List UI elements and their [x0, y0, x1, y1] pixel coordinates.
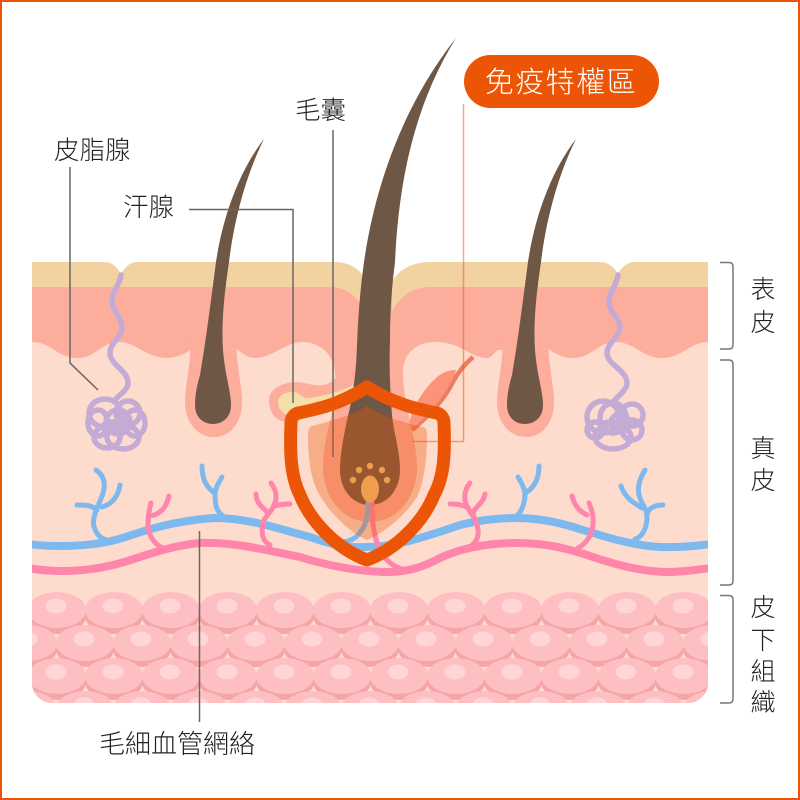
- sweat gland: [269, 378, 356, 422]
- bracket: dermis: [720, 360, 733, 585]
- hair capillary: pink: [372, 502, 402, 569]
- leader line: follicle: [332, 130, 334, 457]
- label: subcutaneous tissue: 下: [750, 627, 776, 655]
- leader line: sebaceous gland: [70, 167, 98, 390]
- leader line: sweat gland: [189, 210, 293, 403]
- label: subcutaneous tissue: 皮: [750, 594, 776, 622]
- leader line: capillary network: [198, 531, 200, 722]
- skin cross-section: [32, 262, 708, 703]
- hair follicle left: [185, 349, 242, 437]
- hair capillary: blue: [338, 503, 368, 542]
- translucent immune zone overlay: [308, 406, 427, 540]
- arrector pili muscle: [409, 357, 473, 430]
- label: dermis: [750, 435, 776, 495]
- leader line: immune privilege zone: [412, 104, 464, 442]
- capillary network: blue vessels: [28, 466, 712, 547]
- label: epidermis: 表: [750, 276, 776, 304]
- label: sebaceous gland: 皮脂腺: [54, 137, 131, 165]
- epidermis layer: [32, 285, 708, 522]
- hair follicle right: [497, 349, 554, 437]
- dermis layer: [32, 342, 708, 703]
- capillary network: pink vessels: [28, 483, 712, 572]
- bracket: epidermis: [720, 262, 733, 349]
- label: dermis: 皮: [750, 467, 776, 495]
- sebaceous gland left: [88, 275, 145, 449]
- stratum corneum: [32, 262, 708, 312]
- shield outline: [291, 387, 444, 560]
- sebaceous gland right: [587, 275, 643, 449]
- bracket: subcutis: [720, 596, 733, 703]
- label: subcutaneous tissue: [750, 594, 776, 717]
- label: sweat gland: 汗腺: [123, 194, 174, 222]
- label: follicle: 毛囊: [295, 97, 346, 125]
- hair right: [507, 139, 576, 424]
- subcutaneous fat cells: [32, 592, 708, 703]
- label: epidermis: 皮: [750, 309, 776, 337]
- callout: immune privilege zone: 免疫特權區: [485, 66, 637, 99]
- label: dermis: 真: [750, 435, 776, 463]
- label: epidermis: [750, 276, 776, 337]
- callout: immune privilege zone: [464, 55, 659, 108]
- label: subcutaneous tissue: 組: [750, 658, 776, 686]
- dermal papilla: [350, 463, 390, 502]
- label: subcutaneous tissue: 織: [750, 689, 776, 717]
- hair left: [195, 139, 264, 424]
- central hair: [340, 38, 456, 505]
- label: capillary network: 毛細血管網絡: [99, 729, 255, 759]
